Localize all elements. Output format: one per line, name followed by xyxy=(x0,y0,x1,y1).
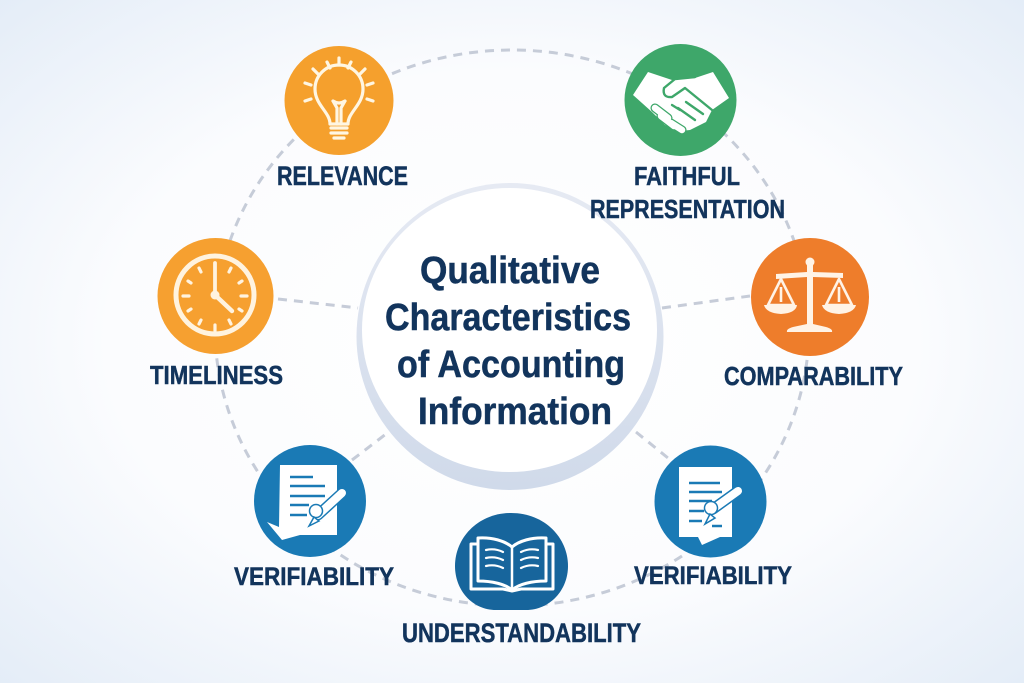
label: comparability: COMPARABILITY xyxy=(724,361,903,391)
label: verifiability, left: VERIFIABILITY xyxy=(234,563,394,591)
icon: document and pen, right xyxy=(654,446,766,558)
label: understandability: UNDERSTANDABILITY xyxy=(402,618,641,648)
dashed ring xyxy=(215,50,809,606)
label: verifiability, right: VERIFIABILITY xyxy=(634,562,792,590)
central title xyxy=(385,250,631,433)
icon: light bulb xyxy=(284,46,394,155)
icon: clock xyxy=(158,238,274,354)
icon: document and pen, left xyxy=(254,445,366,557)
label: faithful representation: FAITHFUL xyxy=(634,161,740,191)
icon: scales xyxy=(751,238,869,356)
icon: handshake xyxy=(624,44,736,156)
label: timeliness: TIMELINESS xyxy=(150,360,283,390)
label: faithful representation: REPRESENTATION xyxy=(590,194,785,224)
dashed spokes xyxy=(278,296,750,460)
label: relevance: RELEVANCE xyxy=(277,161,408,191)
central title: of Accounting xyxy=(397,344,625,386)
label: faithful representation xyxy=(590,161,785,224)
icon: open book xyxy=(455,513,568,610)
central title: Characteristics xyxy=(385,297,631,339)
central circle xyxy=(356,183,664,490)
central title: Information xyxy=(418,391,612,433)
central title: Qualitative xyxy=(420,250,600,292)
